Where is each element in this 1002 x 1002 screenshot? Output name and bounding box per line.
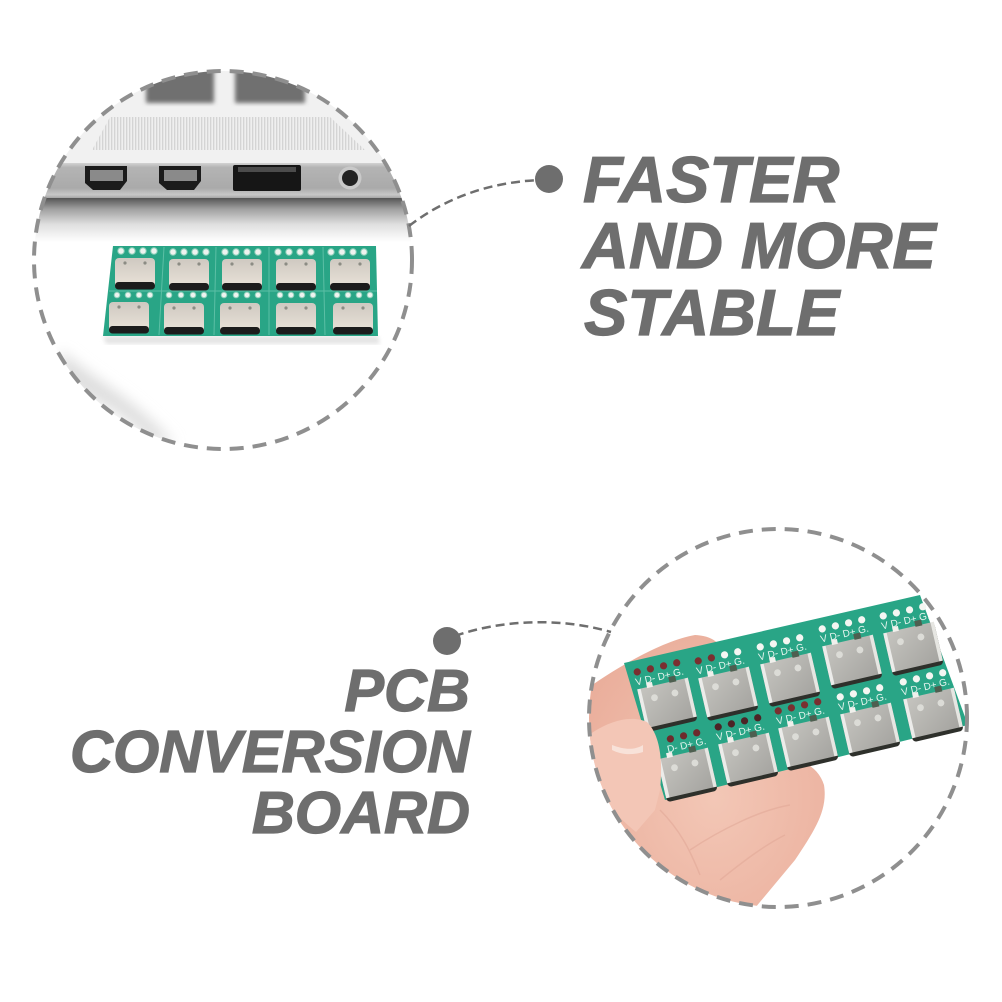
module: top 4: V D- D+ G. <box>819 624 870 645</box>
connector: top callout <box>409 165 563 226</box>
module: top 1: V D- D+ G. <box>634 667 685 688</box>
module: top 2 <box>694 647 759 721</box>
laptop top surface <box>64 71 383 163</box>
connectors <box>115 258 155 290</box>
photo panel: laptop ports and boards <box>36 71 408 439</box>
board shadow <box>103 336 380 344</box>
dashed ring: bottom photo <box>589 529 967 907</box>
heading: PCB conversion board: CONVERSION <box>70 718 471 785</box>
green rotated board <box>624 595 968 802</box>
module: bottom 5 <box>899 668 964 742</box>
module: bottom 1 <box>660 729 717 802</box>
port: audio jack <box>338 166 362 190</box>
green board <box>103 246 378 336</box>
module: bottom 5: V D- D+ G. <box>900 677 951 698</box>
thumb highlight <box>612 745 643 754</box>
infographic canvas <box>32 69 969 909</box>
module: top 1 <box>633 658 698 732</box>
port: USB <box>233 165 301 191</box>
heading: PCB conversion board: BOARD <box>252 779 470 846</box>
laptop edge <box>30 163 420 199</box>
connector: bottom callout <box>433 622 611 655</box>
module: bottom 2 <box>714 713 779 787</box>
photo panel: board held in hand <box>589 595 965 906</box>
module: top 3: V D- D+ G. <box>757 642 808 663</box>
module: top 2: V D- D+ G. <box>695 656 746 677</box>
module: bottom 3: V D- D+ G. <box>775 706 826 727</box>
module: bottom 2: V D- D+ G. <box>715 722 766 743</box>
thumb <box>585 719 661 832</box>
module: bottom 4: V D- D+ G. <box>837 692 888 713</box>
shadow below laptop <box>36 198 408 238</box>
heading: faster and more stable: AND MORE <box>580 209 938 282</box>
solder pads <box>114 248 373 298</box>
module: top 5 <box>879 602 944 676</box>
laptop keys <box>146 68 305 103</box>
dashed ring: top photo <box>34 71 412 449</box>
module: bottom 3 <box>774 697 839 771</box>
heading: PCB conversion board: PCB <box>344 657 470 724</box>
module: top 5: V D- D+ G. <box>880 611 931 632</box>
finger creases <box>660 805 790 880</box>
speaker grille <box>92 117 365 150</box>
module: bottom 4 <box>836 683 901 757</box>
heading: faster and more stable: FASTER <box>583 143 839 216</box>
port: mini display 2 <box>159 166 201 190</box>
module: bottom 1: D- D+ G. <box>666 736 707 756</box>
module dividers <box>109 247 377 335</box>
hand: index finger and palm <box>589 635 825 906</box>
port: mini display 1 <box>85 166 127 190</box>
module: top 4 <box>818 615 883 689</box>
heading: faster and more stable: STABLE <box>584 276 841 349</box>
module: top 3 <box>756 633 821 707</box>
lower paper curl <box>61 352 170 439</box>
